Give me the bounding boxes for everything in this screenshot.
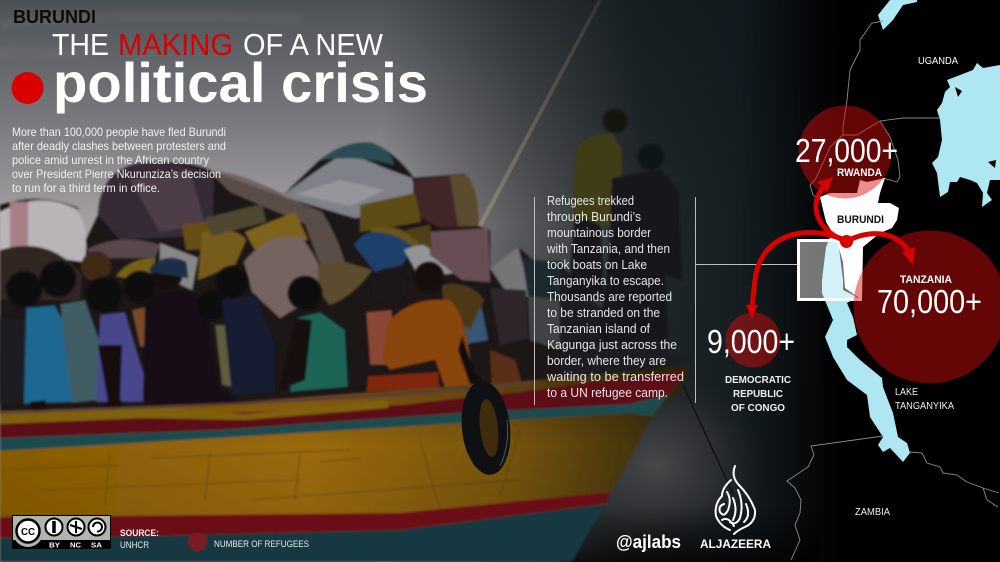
intro paragraph: [12, 126, 226, 195]
life-ring tyre: [462, 382, 510, 475]
boat mast: [478, 0, 602, 227]
arrow to Tanzania: [847, 234, 915, 265]
map labels: [707, 55, 982, 518]
arrow origin dot: [840, 235, 853, 248]
intro paragraph: over President Pierre Nkurunziza’s decision: [12, 168, 221, 181]
map labels: 9,000+: [707, 323, 795, 360]
inset box: [798, 240, 860, 300]
icon: Creative Commons badge: NC: [70, 542, 81, 550]
icon: Creative Commons badge: BY: [49, 542, 60, 550]
red bullet: [12, 72, 44, 104]
title: [12, 27, 428, 114]
country borders: [787, 21, 999, 560]
boat hull: [0, 366, 690, 562]
country name: BURUNDI: [13, 7, 96, 27]
standing passengers: [568, 109, 682, 340]
refugee story text block: Tanzanian island of: [547, 321, 650, 336]
refugee circle: DRC: [726, 312, 780, 368]
refugee circle: Tanzania: [854, 230, 1000, 384]
refugee story text block: with Tanzania, and then: [546, 241, 670, 256]
refugee story text block: Tanganyika to escape.: [547, 273, 664, 288]
map labels: LAKE: [895, 387, 918, 398]
map labels: ZAMBIA: [855, 507, 890, 518]
map labels: 70,000+: [877, 283, 982, 320]
icon: Creative Commons badge: [12, 515, 111, 550]
icon: Creative Commons badge: CC: [21, 527, 35, 538]
refugee story text block: waiting to be transferred: [546, 369, 684, 384]
map: [707, 0, 1000, 560]
intro paragraph: to run for a third term in office.: [12, 182, 160, 195]
legend: number of refugees: [188, 532, 309, 552]
refugee story text block: Thousands are reported: [547, 289, 672, 304]
cargo pile: [0, 143, 560, 412]
Burundi: [820, 178, 899, 300]
source credit: [120, 528, 159, 551]
title: THE: [52, 27, 109, 62]
callout bracket: [534, 197, 797, 405]
refugee story text block: to a UN refugee camp.: [547, 385, 668, 400]
map labels: UGANDA: [918, 55, 958, 67]
refugee story text block: border, where they are: [547, 353, 666, 368]
arrow to DRC: [746, 233, 847, 319]
title: OF A NEW: [243, 27, 384, 62]
map labels: BURUNDI: [837, 214, 884, 226]
map labels: REPUBLIC: [733, 388, 783, 400]
handle: @ajlabs: [616, 532, 681, 552]
map labels: TANZANIA: [900, 274, 952, 286]
icon: Creative Commons badge: SA: [91, 542, 102, 550]
refugee story text block: Refugees trekked: [547, 193, 634, 208]
map labels: TANGANYIKA: [895, 401, 954, 412]
map labels: 27,000+: [795, 132, 898, 169]
icon: calligraphic emblem: [716, 466, 755, 534]
dark mass behind passengers: [558, 261, 683, 378]
refugee circle: Rwanda: [798, 106, 892, 198]
legend: number of refugees: NUMBER OF REFUGEES: [214, 539, 309, 550]
map labels: DEMOCRATIC: [725, 374, 791, 386]
intro paragraph: after deadly clashes between protesters and: [12, 140, 226, 153]
intro paragraph: More than 100,000 people have fled Burundi: [12, 126, 226, 139]
lakes: [822, 0, 1000, 462]
refugee story text block: mountainous border: [547, 225, 652, 240]
title: MAKING: [118, 27, 233, 62]
arrow to Rwanda: [816, 177, 847, 241]
refugee story text block: Kagunga just across the: [547, 337, 677, 352]
refugee story text block: through Burundi’s: [547, 209, 641, 224]
source credit: SOURCE:: [120, 528, 159, 539]
map labels: OF CONGO: [731, 402, 785, 414]
logo: Al Jazeera: ALJAZEERA: [700, 537, 771, 551]
refugee story text block: to be stranded on the: [547, 305, 660, 320]
title: political crisis: [53, 51, 428, 114]
refugee story text block: took boats on Lake: [547, 257, 647, 272]
seated passengers: [0, 258, 482, 422]
logo: Al Jazeera: [700, 466, 771, 551]
mooring rope: [683, 385, 733, 494]
map labels: RWANDA: [837, 167, 882, 179]
photo: refugees on a boat: [0, 0, 733, 562]
intro paragraph: police amid unrest in the African country: [12, 154, 209, 167]
refugee story text block: [546, 193, 684, 400]
source credit: UNHCR: [120, 540, 149, 551]
